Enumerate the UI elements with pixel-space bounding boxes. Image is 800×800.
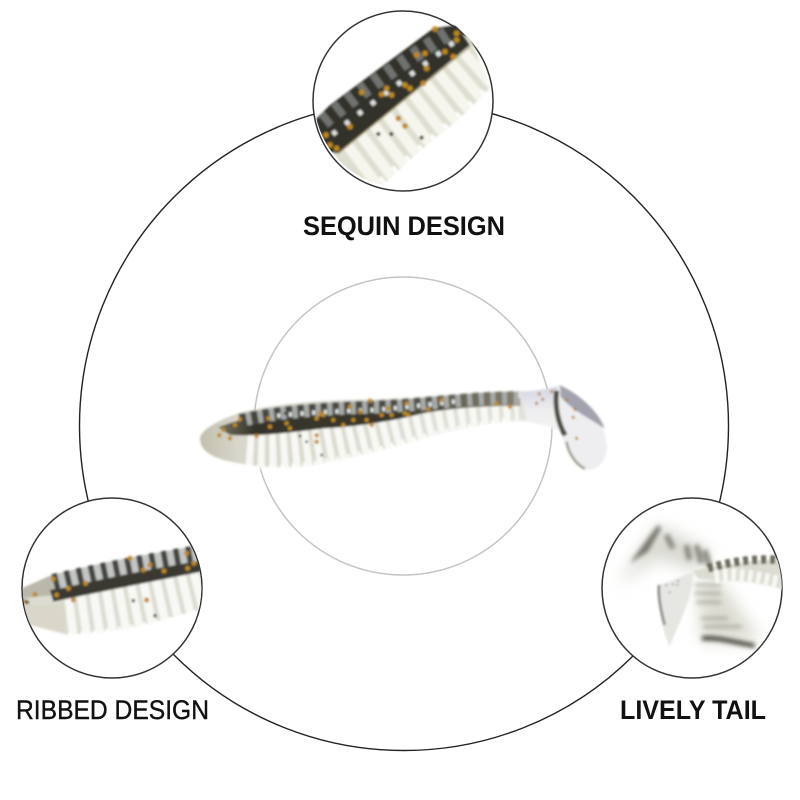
lure tail fin — [510, 384, 607, 470]
silver highlights — [270, 401, 457, 417]
back ribs — [240, 398, 518, 421]
label: sequin design: SEQUIN DESIGN — [303, 211, 505, 241]
large outer ring — [80, 102, 728, 750]
label: ribbed design: RIBBED DESIGN — [16, 695, 209, 725]
label: lively tail: LIVELY TAIL — [620, 695, 766, 725]
ribbed circle frame — [22, 498, 202, 678]
back silver base — [240, 398, 518, 421]
swinging tail fin — [658, 572, 693, 647]
gold sequins — [219, 400, 510, 442]
tail circle frame — [602, 498, 782, 678]
center lure photo — [200, 384, 607, 470]
belly ribs — [247, 409, 518, 451]
detail: lively tail — [602, 498, 783, 678]
sequin close-up — [315, 25, 490, 188]
dark back band — [218, 398, 521, 435]
tail close-up with motion blur — [618, 525, 783, 647]
detail: sequin design — [313, 11, 493, 191]
ribbed body — [693, 558, 783, 590]
belly notches — [247, 421, 513, 468]
lure body — [200, 391, 527, 467]
detail: ribbed design — [22, 498, 205, 678]
sequin circle frame — [313, 11, 493, 191]
inner gray ring — [254, 277, 552, 575]
ribbed close-up — [22, 545, 205, 637]
